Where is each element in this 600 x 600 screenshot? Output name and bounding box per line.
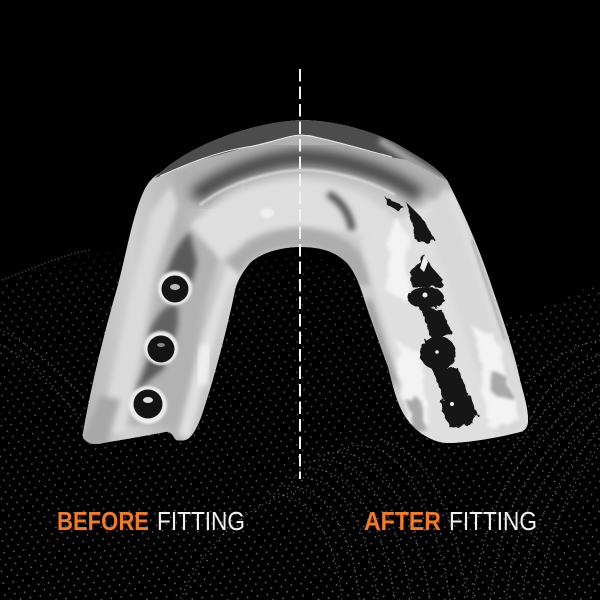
label: after fitting (364, 506, 537, 536)
impression glints (420, 255, 454, 406)
left arm bottom edge shade (83, 394, 122, 444)
peg 2 (144, 331, 178, 365)
central palate (190, 180, 393, 260)
label: before fitting (57, 506, 245, 536)
right arm streaks (368, 300, 395, 385)
upper smear (385, 197, 403, 211)
arch inner band (225, 228, 372, 285)
right arm mottling (385, 215, 520, 430)
impression link (420, 307, 452, 340)
impression link 2 (432, 368, 468, 402)
label: before fitting: FITTING (157, 506, 245, 536)
right arm (360, 190, 540, 450)
impression 0 (410, 253, 443, 287)
left arm base (82, 170, 245, 444)
shelf ridge (200, 170, 395, 205)
left arm channel (128, 235, 222, 425)
guard body (82, 120, 528, 444)
palate shadow right (328, 194, 352, 230)
top dark band (155, 120, 448, 181)
impression 2 (420, 336, 456, 370)
left palate shadow (165, 232, 197, 282)
center dashed divider (299, 69, 301, 479)
before fitting pegs (129, 271, 192, 424)
upper band (407, 203, 435, 244)
palate dimple (260, 208, 274, 218)
left arm outer wall (100, 185, 178, 435)
upper shelf band (175, 135, 447, 205)
impression 1 (408, 287, 444, 309)
peg 1 (158, 271, 192, 305)
label: after fitting: FITTING (449, 506, 537, 536)
top band highlight line (160, 135, 392, 176)
dotted wave field (0, 248, 600, 600)
left arm inner wall (176, 267, 246, 440)
label: after fitting: AFTER (364, 506, 441, 536)
left arm highlights (200, 345, 207, 385)
dark strip (195, 157, 420, 197)
label: before fitting: BEFORE (57, 506, 149, 536)
impression 3 (440, 395, 478, 428)
after fitting black impressions (385, 197, 478, 428)
right top band fade (380, 140, 452, 187)
peg 3 (129, 386, 167, 424)
mouthguard (82, 120, 528, 444)
